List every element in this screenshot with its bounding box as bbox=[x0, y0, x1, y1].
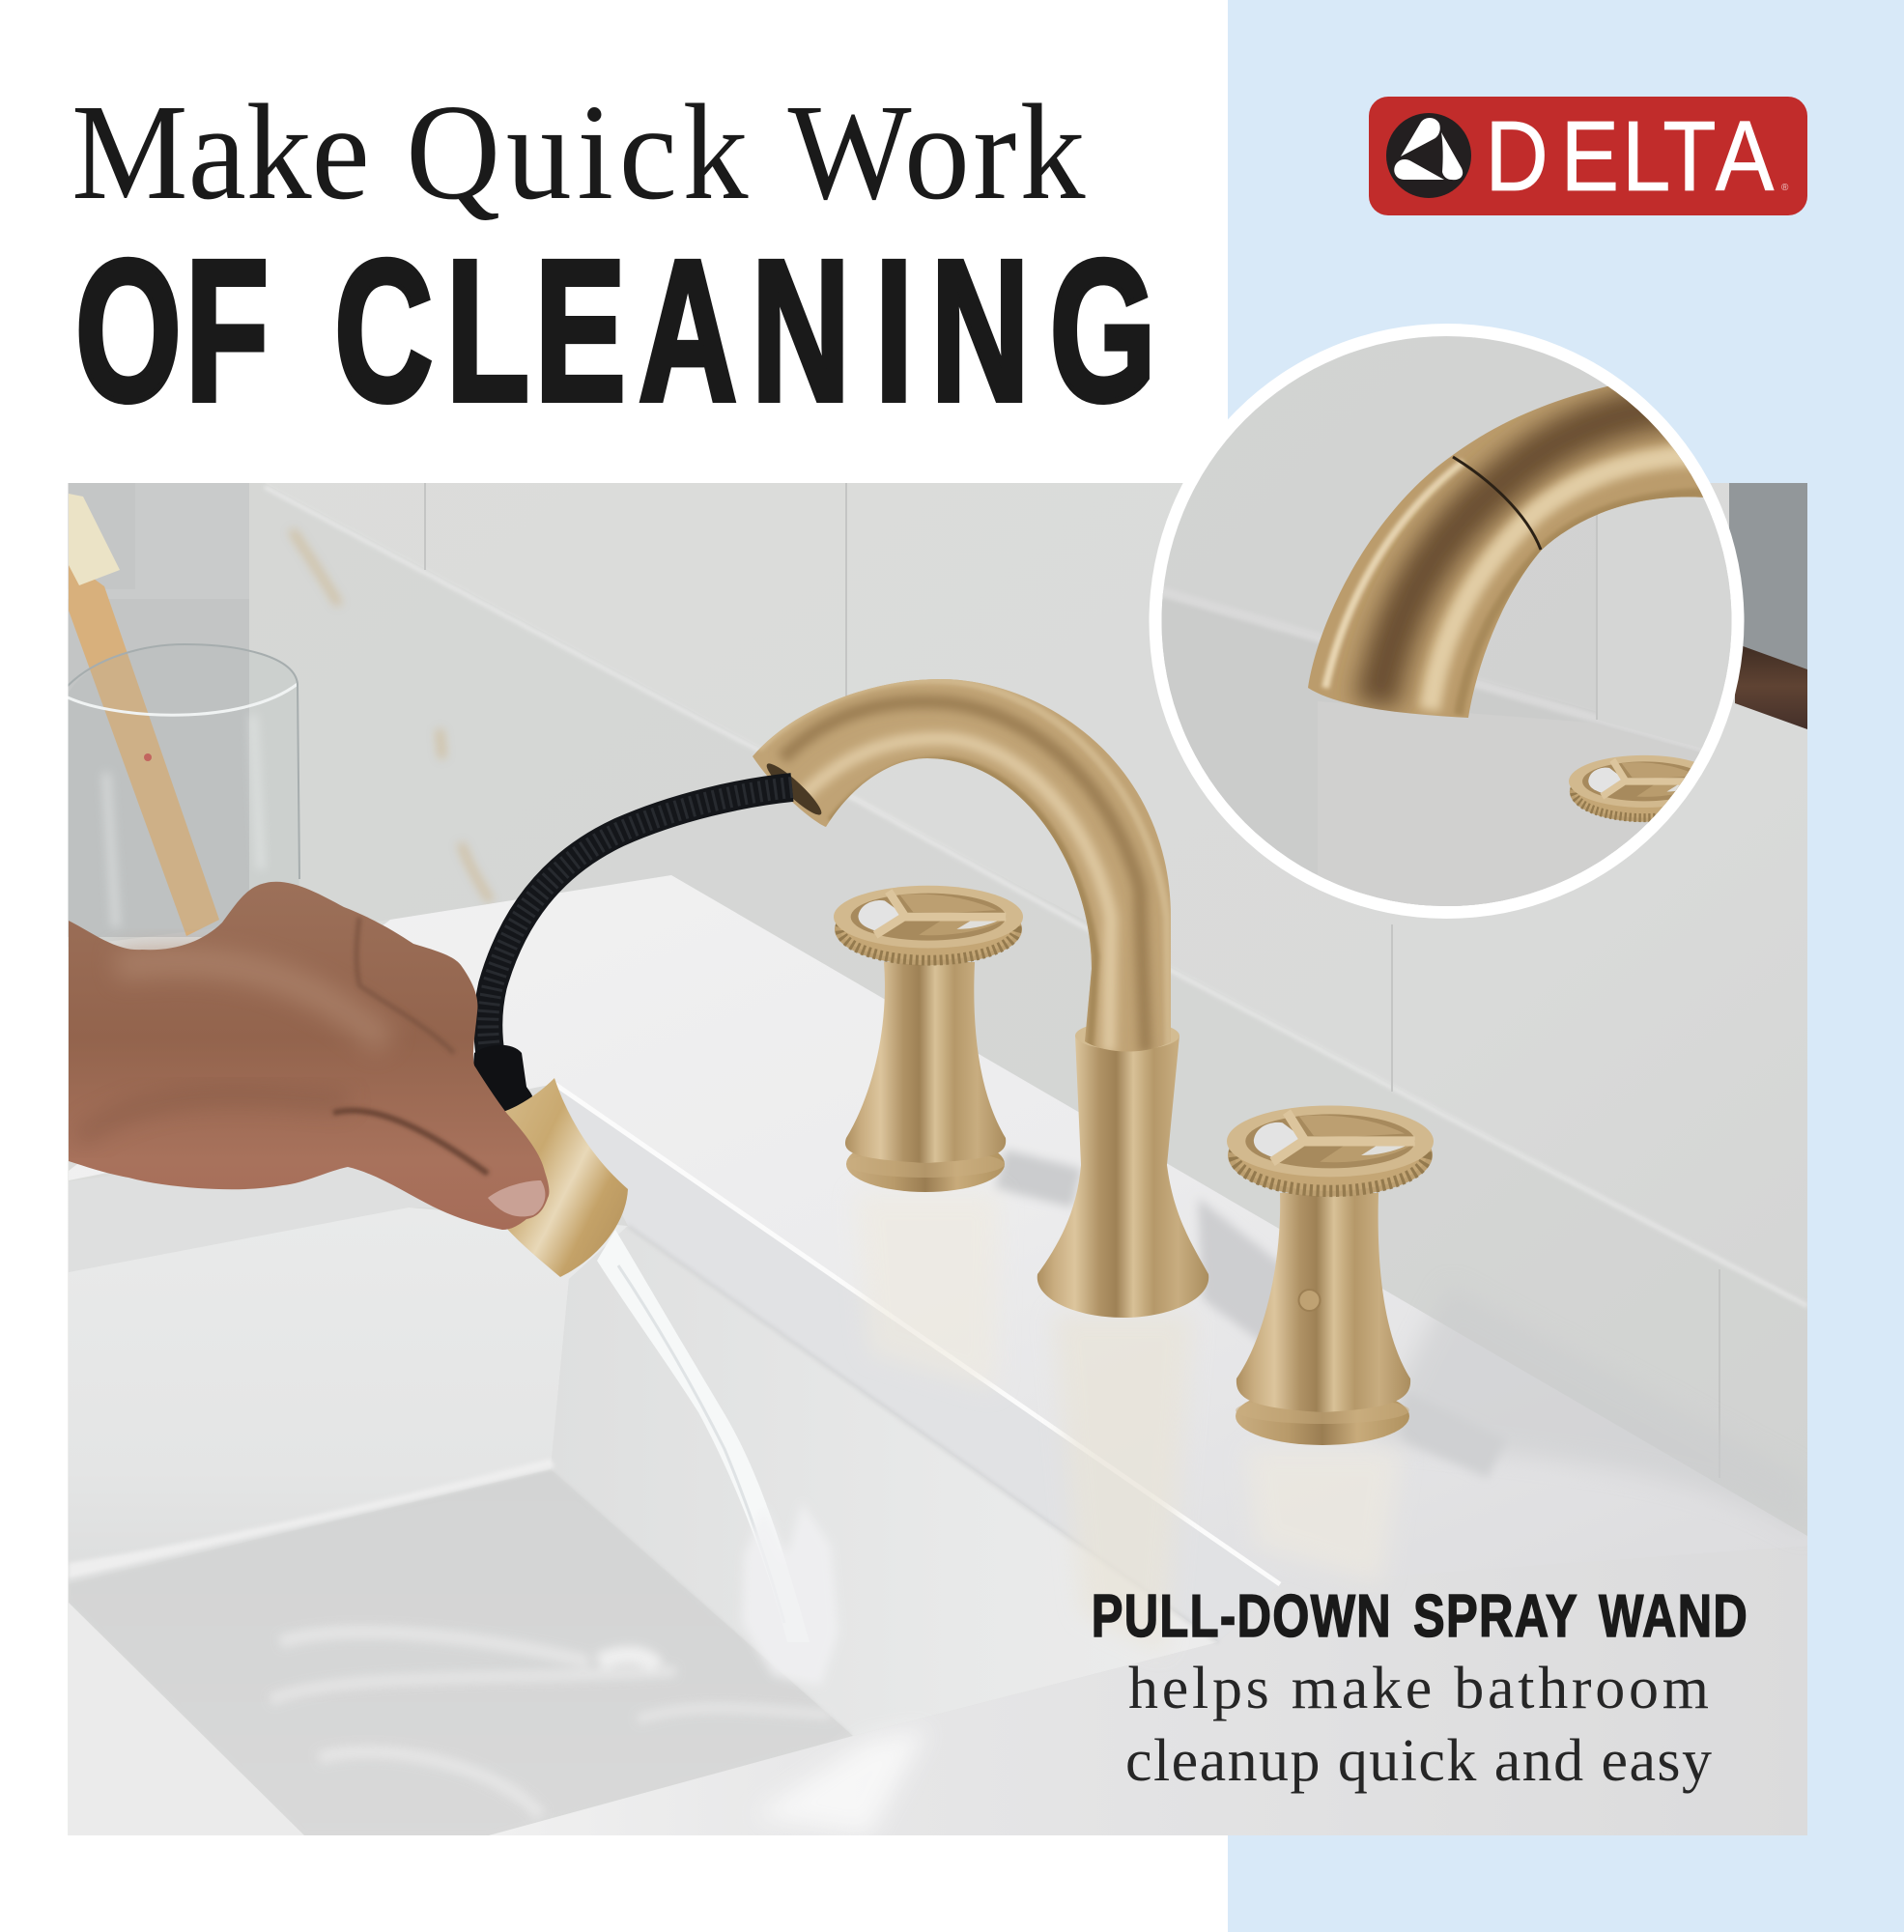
Delta logo bbox=[1369, 97, 1807, 215]
toothbrush bbox=[69, 494, 219, 936]
left handle bbox=[834, 886, 1023, 1192]
right handle bbox=[1227, 1105, 1434, 1445]
center faucet spout body bbox=[753, 679, 1171, 1053]
rim lower edge bbox=[628, 1226, 1218, 1642]
left wheel knob bbox=[834, 886, 1023, 965]
water stream bbox=[597, 1230, 838, 1686]
center faucet base bbox=[1037, 1021, 1208, 1318]
right wheel knob bbox=[1227, 1105, 1434, 1197]
caption: cleanup quick and easy: cleanup quick and easy bbox=[1125, 1728, 1712, 1794]
sink right wall bbox=[638, 1250, 1217, 1736]
caption: PULL-DOWN SPRAY WAND: PULL-DOWN SPRAY WAND bbox=[1092, 1581, 1748, 1649]
caption: helps make bathroom: helps make bathroom bbox=[1128, 1656, 1709, 1721]
title: OF CLEANING: OF CLEANING bbox=[75, 218, 1156, 442]
blue background panel bbox=[1228, 0, 1904, 1932]
title: Make Quick Work: Work bbox=[788, 76, 1089, 229]
registered mark: ® bbox=[1781, 183, 1789, 193]
main countertop bbox=[69, 875, 1807, 1584]
water splash bbox=[744, 1515, 834, 1681]
counter highlight bbox=[776, 1733, 916, 1832]
spray wand head bbox=[493, 1078, 628, 1277]
faucet shadows and reflections bbox=[855, 1150, 1507, 1652]
thumbnail bbox=[488, 1180, 545, 1216]
logo symbol bbox=[1386, 113, 1471, 198]
left front counter bbox=[69, 1603, 304, 1835]
sink floor bbox=[69, 1469, 853, 1835]
inset ledge bbox=[1150, 589, 1739, 918]
spout opening bbox=[762, 758, 826, 820]
front counter bbox=[489, 1536, 1807, 1835]
rim highlight bbox=[554, 1084, 1280, 1584]
main photo: faucet and sink scene bbox=[68, 483, 1807, 1835]
set screw dot bbox=[1298, 1290, 1320, 1311]
logo wordmark: DELTA bbox=[1485, 100, 1775, 212]
inset wall bbox=[1150, 328, 1748, 918]
inset spout seam bbox=[1453, 457, 1541, 550]
sink rim reflection bbox=[69, 1459, 554, 1578]
wall tiles bbox=[68, 483, 1807, 1835]
sink back wall bbox=[69, 1208, 628, 1520]
title: Make Quick Work: Quick bbox=[406, 76, 792, 229]
inset spout bbox=[1308, 383, 1739, 718]
water ripples bbox=[270, 1633, 831, 1816]
spray wand connector bbox=[473, 1045, 534, 1119]
dark wall and walnut bar at right bbox=[1729, 483, 1807, 729]
inset wheel knob bbox=[1569, 755, 1719, 822]
sink: countertop left band bbox=[69, 1135, 618, 1272]
hand bbox=[69, 882, 549, 1230]
far counter shadow bbox=[1387, 1319, 1739, 1497]
counter rim bbox=[554, 1084, 1280, 1642]
glass tumbler bbox=[68, 644, 299, 947]
title: Make Quick Work: Make bbox=[71, 76, 403, 229]
braided hose bbox=[488, 787, 792, 1058]
inset circle: spout close-up bbox=[1150, 324, 1748, 919]
